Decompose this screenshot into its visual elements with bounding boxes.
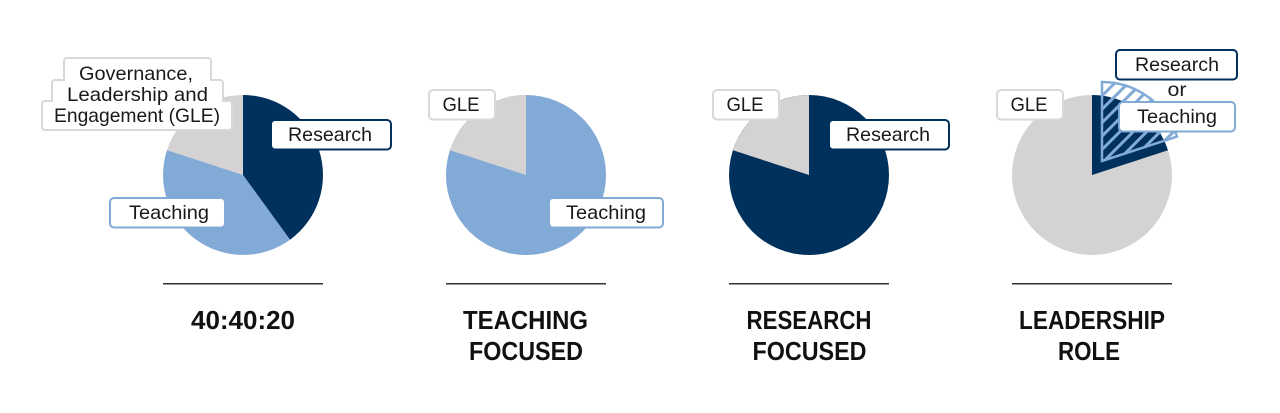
heading: research focused: FOCUSED	[752, 336, 866, 366]
heading: leadership role: LEADERSHIP	[1019, 305, 1165, 335]
heading: teaching focused: TEACHING	[463, 305, 588, 335]
label: GLE full name: Engagement (GLE)	[54, 105, 220, 127]
label: Teaching: Teaching	[566, 202, 646, 224]
label: GLE	[713, 90, 779, 120]
label: GLE full name: Leadership and	[67, 84, 208, 106]
label: GLE: GLE	[1010, 94, 1048, 116]
label: Teaching: Teaching	[1137, 106, 1217, 128]
heading: leadership role	[1019, 305, 1165, 366]
label: GLE: GLE	[726, 94, 764, 116]
heading: research focused	[746, 305, 872, 366]
divider line	[1012, 283, 1172, 284]
label: Research	[1116, 50, 1237, 80]
label: GLE: GLE	[442, 94, 480, 116]
label: Teaching	[549, 198, 663, 228]
divider line	[163, 283, 323, 284]
heading: teaching focused	[463, 305, 588, 366]
label: Research: Research	[846, 124, 930, 146]
heading: research focused: RESEARCH	[746, 305, 872, 335]
heading: 40:40:20: 40:40:20	[191, 305, 295, 335]
label: Teaching	[110, 198, 225, 228]
label: GLE full name	[42, 58, 232, 130]
label: Research	[829, 120, 949, 150]
label: or: or	[1168, 79, 1187, 101]
divider line	[446, 283, 606, 284]
panel: research focused	[713, 90, 949, 366]
label: GLE	[997, 90, 1063, 120]
panel: leadership role	[997, 50, 1237, 366]
heading: leadership role: ROLE	[1058, 336, 1120, 366]
panel: teaching focused	[429, 90, 663, 366]
pie chart: 40:40:20	[163, 95, 323, 255]
pie chart: research focused	[729, 95, 889, 255]
label: Research: Research	[1135, 54, 1219, 76]
pie chart: teaching focused	[446, 95, 606, 255]
panel: 40:40:20	[42, 58, 391, 335]
label: GLE	[429, 90, 495, 120]
label: GLE full name: Governance,	[79, 63, 193, 85]
label: Research	[271, 120, 391, 150]
hatched wedge: research or teaching	[1102, 82, 1177, 161]
label: Teaching: Teaching	[129, 202, 209, 224]
label: Research: Research	[288, 124, 372, 146]
heading: teaching focused: FOCUSED	[469, 336, 583, 366]
divider line	[729, 283, 889, 284]
label: Teaching	[1119, 102, 1235, 132]
pie chart: leadership role	[1012, 95, 1172, 255]
